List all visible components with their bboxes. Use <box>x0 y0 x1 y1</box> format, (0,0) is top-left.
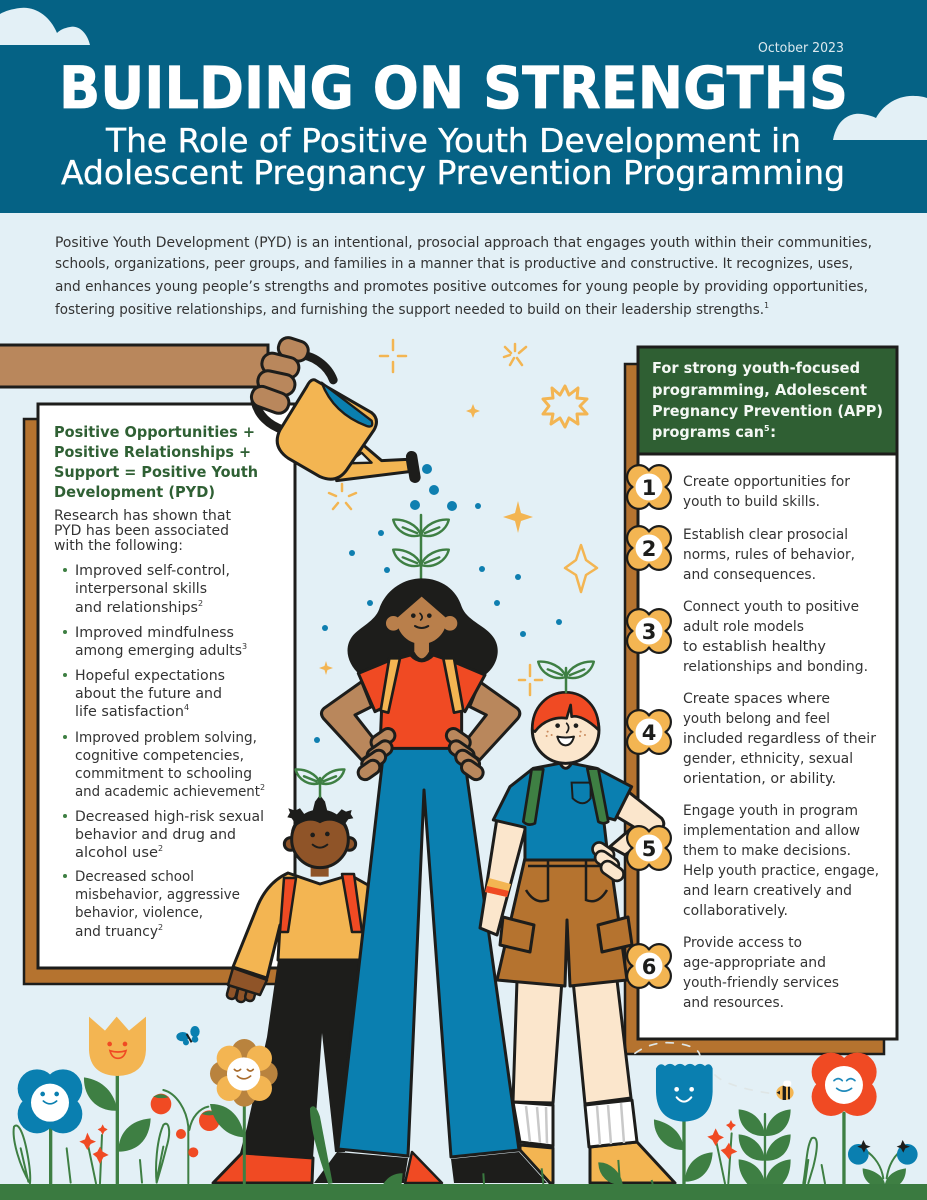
intro paragraph: Positive Youth Development (PYD) is an intentional, prosocial approach that engages youth within their communities, <box>55 235 872 251</box>
list text: implementation and allow <box>683 823 860 839</box>
panel heading: Support = Positive Youth <box>54 463 258 481</box>
flower: red with smile <box>812 1053 877 1183</box>
list text: them to make decisions. <box>683 843 851 859</box>
icon: hand <box>249 335 311 416</box>
bullet list: and truancy <box>75 924 158 940</box>
list text: Help youth practice, engage, <box>683 863 879 879</box>
boy shoes <box>520 1142 675 1183</box>
list text: Establish clear prosocial <box>683 527 848 543</box>
bullet list: cognitive competencies, <box>75 748 244 764</box>
boy socks <box>513 1100 637 1147</box>
bullet list: behavior, violence, <box>75 905 203 921</box>
bullet list: Improved mindfulness <box>75 625 234 641</box>
number badges <box>626 464 672 989</box>
intro paragraph: fostering positive relationships, and furnishing the support needed to build on their leadership strengths. <box>55 302 764 318</box>
woman shirt <box>358 655 485 748</box>
bullet list: 2 <box>158 844 163 853</box>
list text: and learn creatively and <box>683 883 852 899</box>
panel heading: Development (PYD) <box>54 483 215 501</box>
panel header: For strong youth-focused <box>652 359 860 377</box>
garden left flowers <box>14 1017 403 1184</box>
flower: blue tulip <box>654 1064 713 1183</box>
grass and leaf at boy shoe <box>483 1160 653 1184</box>
figure: central woman <box>314 578 547 1183</box>
flower: orange with sleeping face <box>210 1039 278 1183</box>
panel header <box>638 347 897 454</box>
list text: to establish healthy <box>683 639 826 655</box>
girl shoes <box>213 1153 313 1183</box>
icon: right cloud <box>833 96 927 140</box>
intro paragraph: 1 <box>764 301 769 310</box>
list text: collaboratively. <box>683 903 788 919</box>
intro paragraph <box>55 235 872 318</box>
number badges: 4 <box>642 721 656 745</box>
water drops <box>314 464 562 743</box>
number badges: 3 <box>642 620 656 644</box>
subtitle: Adolescent Pregnancy Prevention Programming <box>61 153 845 192</box>
lead-in text: Research has shown that <box>54 508 231 524</box>
grass blades <box>310 1106 333 1184</box>
woman shoes <box>314 1152 547 1183</box>
intro paragraph: schools, organizations, peer groups, and families in a manner that is productive and constructive. It recognizes, uses, <box>55 256 853 272</box>
bullet list: interpersonal skills <box>75 581 207 597</box>
panel header: 5 <box>764 424 770 433</box>
number badges: 6 <box>642 955 656 979</box>
boy left arm <box>480 818 526 935</box>
bullet list: 2 <box>158 923 163 932</box>
leafy green plant <box>739 1109 791 1184</box>
bullet list: and relationships <box>75 600 198 616</box>
bullet list: 3 <box>242 642 247 651</box>
flower: blue smiling <box>14 1069 82 1183</box>
butterfly <box>176 1026 200 1045</box>
bullet list: and academic achievement <box>75 784 260 800</box>
bee with dashed trail <box>635 1043 794 1100</box>
panel heading: Positive Opportunities + <box>54 423 255 441</box>
list text: and consequences. <box>683 567 816 583</box>
number badges: 5 <box>642 837 656 861</box>
panel header: programs can <box>652 423 764 441</box>
red small flowers <box>707 1120 737 1183</box>
flower: yellow tulip <box>84 1017 151 1183</box>
panel: right backing <box>625 364 884 1054</box>
boy shirt <box>493 763 632 860</box>
list text: Connect youth to positive <box>683 599 859 615</box>
red small flowers <box>79 1124 109 1183</box>
number badges: 1 <box>642 476 656 500</box>
boy hair <box>532 692 599 732</box>
number badges: 2 <box>642 537 656 561</box>
woman hair <box>348 578 498 675</box>
list text: and resources. <box>683 995 784 1011</box>
woman backpack straps <box>381 658 463 713</box>
bullet list: 2 <box>260 783 265 792</box>
bullet list: life satisfaction <box>75 704 184 720</box>
icon: top left cloud <box>0 8 90 45</box>
panel header: programming, Adolescent <box>652 381 868 399</box>
boy legs <box>513 980 631 1104</box>
lead-in text <box>54 508 231 554</box>
list text: youth to build skills. <box>683 494 820 510</box>
panel heading: Positive Relationships + <box>54 443 251 461</box>
figure: boy with backpack <box>480 692 675 1183</box>
bullet list: alcohol use <box>75 845 158 861</box>
girl hand <box>226 968 267 1003</box>
header banner <box>0 0 927 213</box>
date: October 2023 <box>758 41 844 56</box>
lead-in text: PYD has been associated <box>54 523 229 539</box>
list text: Engage youth in program <box>683 803 858 819</box>
bullet list: Improved self-control, <box>75 563 230 579</box>
bullet list <box>63 563 265 940</box>
panel: APP programs can <box>638 347 897 1039</box>
panel: left backing <box>24 419 280 984</box>
arm holding can <box>0 345 268 387</box>
plant sprout: girl <box>296 769 344 797</box>
list text: youth-friendly services <box>683 975 839 991</box>
icon: watering can <box>249 335 415 481</box>
boy straps <box>523 769 608 825</box>
subtitle <box>61 121 845 192</box>
woman pants <box>338 748 519 1157</box>
bullet list: Hopeful expectations <box>75 668 225 684</box>
list text: orientation, or ability. <box>683 771 836 787</box>
bullet list: behavior and drug and <box>75 827 236 843</box>
panel header: : <box>770 423 776 441</box>
bullet list: about the future and <box>75 686 222 702</box>
intro paragraph: and enhances young people’s strengths and promotes positive outcomes for young people by providing opportunities, <box>55 279 868 295</box>
bullet list: Decreased high-risk sexual <box>75 809 264 825</box>
bullet list: misbehavior, aggressive <box>75 887 240 903</box>
girl pants <box>240 960 368 1158</box>
bullet list: Improved problem solving, <box>75 730 257 746</box>
list text: adult role models <box>683 619 804 635</box>
title: BUILDING ON STRENGTHS <box>59 54 848 122</box>
lead-in text: with the following: <box>54 538 183 554</box>
woman hands <box>355 726 486 782</box>
bullet list: 4 <box>184 703 189 712</box>
boy right arm <box>610 792 664 855</box>
panel heading <box>54 423 258 501</box>
list text: Provide access to <box>683 935 802 951</box>
list text: gender, ethnicity, sexual <box>683 751 853 767</box>
boy hand <box>590 840 626 884</box>
plant sprout: boy <box>538 662 594 692</box>
woman arms <box>321 682 520 760</box>
woman neck and face <box>414 635 429 658</box>
girl head <box>284 795 356 877</box>
blueberries <box>803 1138 918 1184</box>
ground <box>0 1184 927 1200</box>
panel: positive youth development <box>38 404 295 968</box>
bullet list: among emerging adults <box>75 643 242 659</box>
plant sprout: woman <box>393 515 449 580</box>
bullet list: commitment to schooling <box>75 766 252 782</box>
boy shorts <box>497 858 632 986</box>
list text: included regardless of their <box>683 731 876 747</box>
bullet list: 2 <box>198 599 203 608</box>
boy neck and face <box>558 752 573 768</box>
list text: age-appropriate and <box>683 955 826 971</box>
sparkles <box>319 340 597 695</box>
list text: Create opportunities for <box>683 474 850 490</box>
list text: norms, rules of behavior, <box>683 547 855 563</box>
girl shirt <box>233 873 368 978</box>
bullet list: Decreased school <box>75 869 194 885</box>
red berries <box>140 1090 220 1183</box>
subtitle: The Role of Positive Youth Development in <box>105 121 801 160</box>
list text <box>683 474 879 1011</box>
list text: youth belong and feel <box>683 711 830 727</box>
garden right flowers <box>483 1043 918 1184</box>
figure: girl with yellow shirt <box>213 769 368 1183</box>
list text: Create spaces where <box>683 691 830 707</box>
panel header: Pregnancy Prevention (APP) <box>652 402 883 420</box>
list text: relationships and bonding. <box>683 659 868 675</box>
